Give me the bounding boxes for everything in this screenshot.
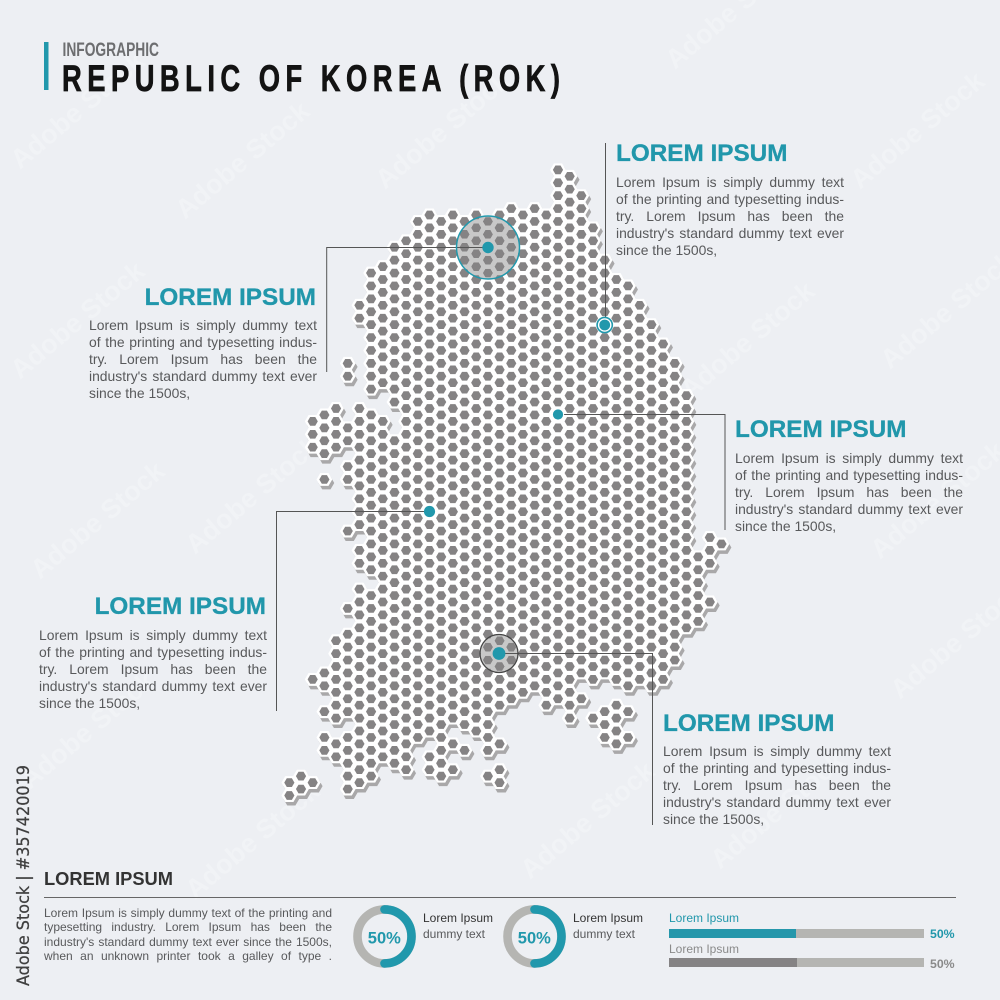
body text: of the printing and typesetting indus- [89, 334, 317, 350]
donut chart 1: 50% [368, 930, 401, 948]
marker: central dot [552, 409, 564, 420]
callout: lower right [663, 710, 891, 827]
donut chart 2: 50% [518, 930, 551, 948]
body text: try. Lorem Ipsum has been the [39, 660, 267, 676]
body text: industry's standard dummy text ever [616, 224, 844, 240]
heading: LOREM IPSUM [663, 710, 834, 737]
body text: Lorem Ipsum is simply dummy text [89, 316, 317, 332]
bar 1 value: 50% [930, 927, 955, 941]
callout: upper left [89, 284, 317, 400]
watermark: Adobe Stock [180, 775, 326, 905]
marker: west dot [424, 506, 435, 517]
donut 1 label: dummy text [423, 927, 485, 941]
donut chart 2 [508, 909, 562, 963]
marker: south circle [480, 634, 518, 672]
subtitle: INFOGRAPHIC [62, 38, 159, 61]
heading: LOREM IPSUM [616, 140, 787, 167]
body text: Lorem Ipsum is simply dummy text [663, 743, 891, 759]
leader line: top right callout [604, 143, 606, 325]
body text: of the printing and typesetting indus- [663, 760, 891, 776]
body text [39, 626, 267, 710]
heading: LOREM IPSUM [735, 416, 906, 443]
donut 2 label: dummy text [573, 927, 635, 941]
footer paragraph [44, 906, 332, 963]
bar 2 label: Lorem Ipsum [669, 942, 739, 956]
body text: try. Lorem Ipsum has been the [663, 777, 891, 793]
watermark: Adobe Stock [515, 755, 661, 885]
marker: north east ringed dot [597, 317, 612, 333]
leader line: right callout [558, 414, 725, 530]
watermark: Adobe Stock [705, 745, 851, 875]
footer paragraph: Lorem Ipsum is simply dummy text of the printing and [44, 906, 332, 920]
callout: right [735, 416, 963, 534]
body text: Lorem Ipsum is simply dummy text [735, 450, 963, 466]
divider: footer [44, 897, 956, 898]
callout: top right [616, 140, 844, 258]
body text: Lorem Ipsum is simply dummy text [39, 626, 267, 642]
body text: of the printing and typesetting indus- [39, 644, 267, 660]
heading: LOREM IPSUM [145, 284, 316, 311]
watermark: Adobe Stock [25, 455, 171, 585]
bar 2 value: 50% [930, 957, 955, 971]
body text: Lorem Ipsum is simply dummy text [616, 174, 844, 190]
body text: since the 1500s, [89, 384, 190, 400]
body text: since the 1500s, [616, 242, 717, 258]
watermark: Adobe Stock [5, 255, 151, 385]
leader line: upper left callout [327, 248, 488, 372]
title: REPUBLIC OF KOREA (ROK) [62, 58, 560, 99]
heading: LOREM IPSUM [95, 593, 266, 620]
body text: of the printing and typesetting indus- [616, 190, 844, 206]
donut 1 label [423, 911, 493, 941]
body text: industry's standard dummy text ever [89, 368, 317, 384]
footer heading: LOREM IPSUM [44, 868, 173, 889]
hexagon map of South Korea [284, 159, 729, 823]
body text: industry's standard dummy text ever [663, 794, 891, 810]
body text: try. Lorem Ipsum has been the [616, 208, 844, 224]
donut 1 label: Lorem Ipsum [423, 911, 493, 925]
watermark: Adobe Stock [845, 65, 991, 195]
body text [735, 450, 963, 534]
footer paragraph: typesetting industry. Lorem Ipsum has been the [44, 920, 332, 934]
donut chart 1 [358, 909, 412, 963]
marker: north circle [456, 216, 520, 279]
body text: industry's standard dummy text ever [39, 678, 267, 694]
leader line: lower left callout [276, 512, 430, 711]
donut 2 label [573, 911, 643, 941]
callout: lower left [39, 593, 267, 710]
bar 2 [669, 958, 924, 967]
title accent bar [44, 42, 48, 90]
body text: since the 1500s, [663, 811, 764, 827]
body text [663, 743, 891, 827]
body text: since the 1500s, [735, 518, 836, 534]
body text: industry's standard dummy text ever [735, 500, 963, 516]
watermark: Adobe Stock [170, 95, 316, 225]
watermark: Adobe Stock [180, 430, 326, 560]
watermark: Adobe Stock [675, 275, 821, 405]
body text [616, 174, 844, 258]
vertical stock credit: Adobe Stock | #357420019 [14, 765, 33, 986]
bar 1 [669, 929, 924, 938]
body text: try. Lorem Ipsum has been the [89, 350, 317, 366]
body text [89, 316, 317, 400]
footer paragraph: when an unknown printer took a galley of type . [44, 949, 332, 963]
body text: try. Lorem Ipsum has been the [735, 484, 963, 500]
bar 1 label: Lorem Ipsum [669, 911, 739, 925]
watermark: Adobe Stock [5, 45, 151, 175]
body text: since the 1500s, [39, 694, 140, 710]
leader line: lower right callout [499, 654, 652, 825]
donut 2 label: Lorem Ipsum [573, 911, 643, 925]
footer paragraph: industry's standard dummy text ever since the 1500s, [44, 935, 332, 949]
body text: of the printing and typesetting indus- [735, 466, 963, 482]
watermark: Adobe Stock [370, 65, 516, 195]
watermark: Adobe Stock [15, 665, 161, 795]
